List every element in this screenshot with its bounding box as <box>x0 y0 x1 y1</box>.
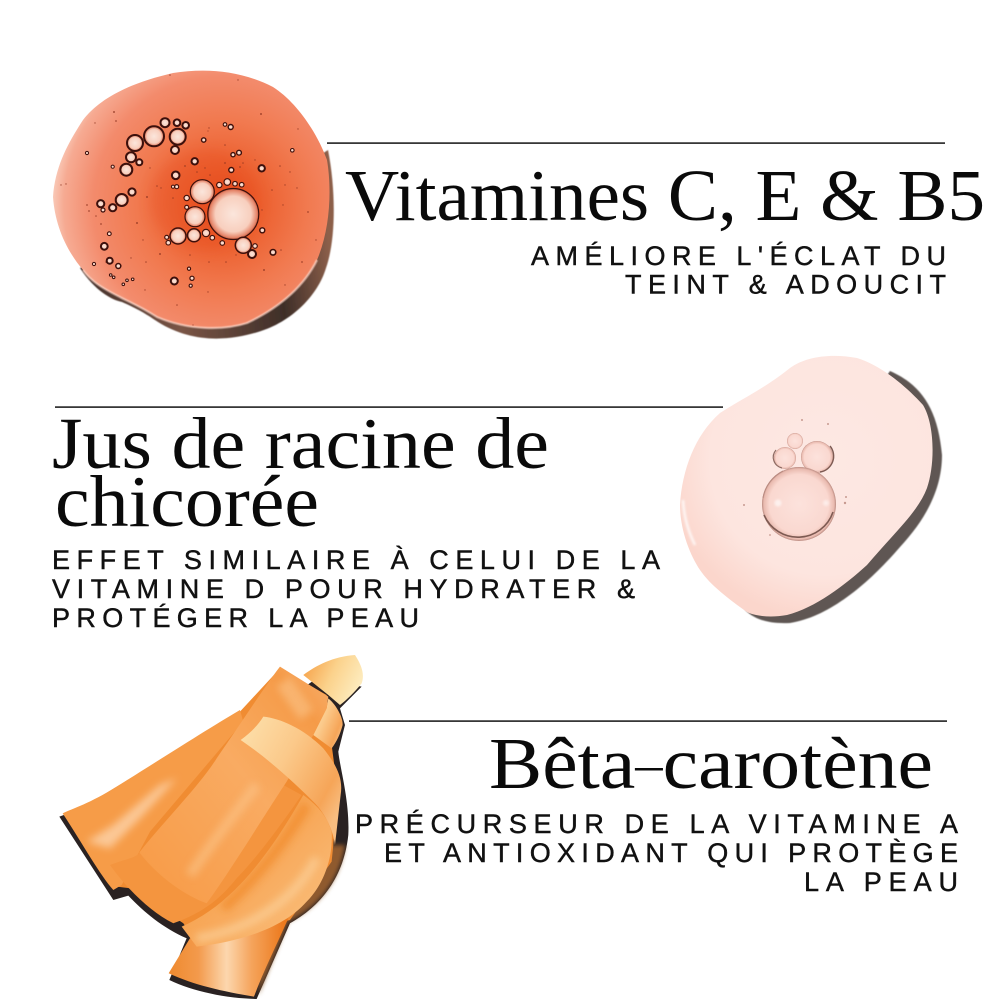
text block: ET ANTIOXIDANT QUI PROTÈGE <box>384 838 958 868</box>
divider line <box>349 720 947 722</box>
bottom ribbon <box>169 918 288 997</box>
panel: bêta-carotène <box>59 655 958 999</box>
text block <box>531 241 946 300</box>
text block: EFFET SIMILAIRE À CELUI DE LA <box>52 545 660 575</box>
lower middle ribbon <box>110 785 302 923</box>
back-left ribbon <box>63 710 243 890</box>
panel: jus de racine de chicorée <box>52 356 942 633</box>
bubbles <box>743 419 847 541</box>
text block: PROTÉGER LA PEAU <box>52 603 419 633</box>
text block <box>52 545 660 633</box>
heading: Bêta <box>489 723 623 804</box>
divider line <box>327 142 945 144</box>
panel: vitamines C, E & B5 <box>53 71 985 339</box>
text block: VITAMINE D POUR HYDRATER & <box>52 574 635 604</box>
heading: chicorée <box>55 461 319 542</box>
heading: Vitamines C, E & B5 <box>345 155 985 236</box>
text block <box>355 809 958 897</box>
heading: – <box>634 736 664 792</box>
heading <box>52 403 549 542</box>
text block: AMÉLIORE L'ÉCLAT DU <box>531 241 946 271</box>
right upper ribbon <box>313 698 343 748</box>
divider line <box>55 406 723 408</box>
bubbles <box>85 118 294 287</box>
folded top ribbon <box>241 717 341 845</box>
image: pale pink serum droplet <box>680 356 942 623</box>
top-right ribbon <box>303 655 363 705</box>
text block: LA PEAU <box>804 867 958 897</box>
heading: carotène <box>663 723 933 804</box>
image: orange serum droplet with bubbles <box>53 71 334 339</box>
heading: Jus de racine de <box>52 403 549 484</box>
base fill between ribbons <box>70 668 338 943</box>
text block: TEINT & ADOUCIT <box>625 270 946 300</box>
specks <box>60 74 317 326</box>
main ribbon <box>139 667 328 903</box>
shadow <box>59 678 362 999</box>
image: carrot ribbons <box>59 655 363 999</box>
lower round ribbon <box>182 795 332 947</box>
text block: PRÉCURSEUR DE LA VITAMINE A <box>355 809 958 839</box>
